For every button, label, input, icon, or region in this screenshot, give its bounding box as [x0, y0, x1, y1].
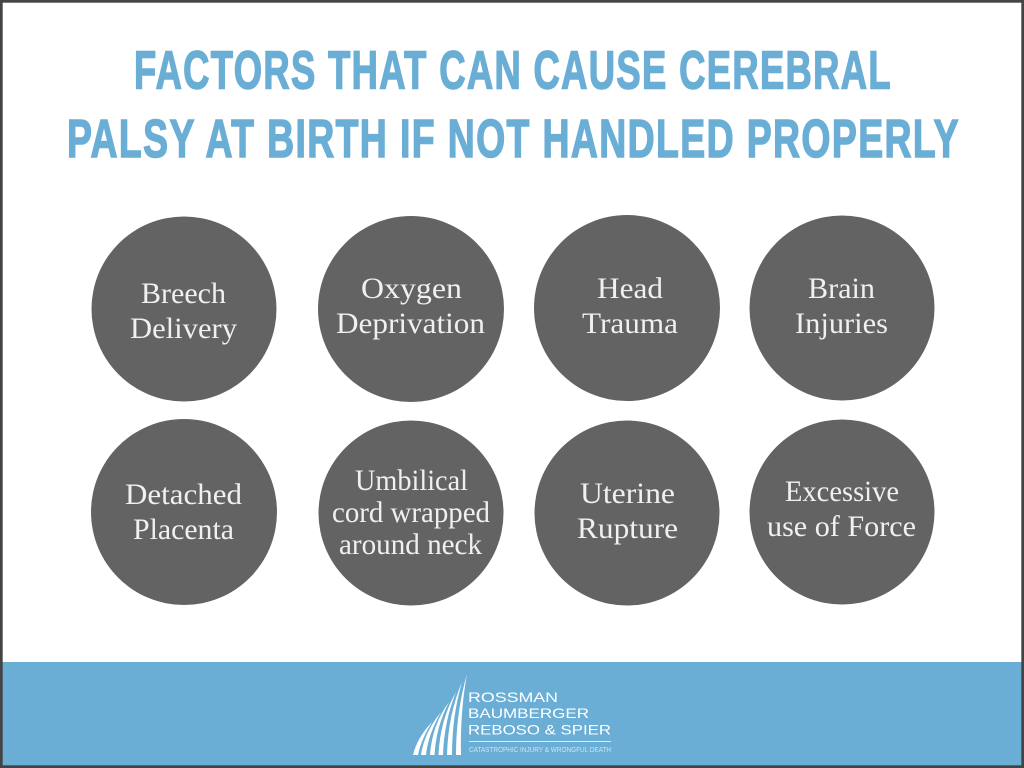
- factor: Excessive use of Force: [750, 420, 934, 604]
- logo wordmark: ROSSMAN: [468, 689, 558, 705]
- title: [67, 40, 960, 169]
- factor: Head Trauma: [534, 215, 720, 401]
- factor: Umbilical cord wrapped around neck: cord wrapped: [332, 497, 490, 529]
- factor: Detached Placenta: Placenta: [133, 514, 234, 546]
- factor: Umbilical cord wrapped around neck: around neck: [339, 529, 482, 561]
- logo wordmark: REBOSO & SPIER: [468, 722, 611, 738]
- factor: Uterine Rupture: [534, 420, 720, 606]
- factor: Detached Placenta: Detached: [125, 479, 242, 511]
- factor: Breech Delivery: [92, 216, 276, 402]
- factor: Head Trauma: Head: [597, 273, 663, 305]
- factor: Breech Delivery: Delivery: [130, 313, 237, 345]
- footer band: [0, 662, 1024, 768]
- logo: Rossman Baumberger Reboso & Spier: [413, 674, 611, 755]
- factor: Brain Injuries: Injuries: [795, 308, 888, 340]
- factor: Oxygen Deprivation: Deprivation: [336, 308, 485, 340]
- factor: Uterine Rupture: Uterine: [580, 478, 675, 510]
- icon: logo swoosh: [413, 674, 467, 755]
- logo divider: [469, 741, 611, 742]
- factor: Umbilical cord wrapped around neck: Umbilical: [355, 465, 468, 497]
- factor: Umbilical cord wrapped around neck: [318, 420, 504, 606]
- factor: Oxygen Deprivation: [318, 216, 504, 402]
- factor: Excessive use of Force: Excessive: [785, 476, 899, 508]
- factor: Uterine Rupture: Rupture: [577, 513, 678, 545]
- factor: Detached Placenta: [91, 419, 277, 605]
- factor: Excessive use of Force: use of Force: [767, 511, 916, 543]
- logo wordmark: BAUMBERGER: [468, 705, 589, 721]
- logo tagline: CATASTROPHIC INJURY & WRONGFUL DEATH: [469, 747, 611, 754]
- factor: Oxygen Deprivation: Oxygen: [361, 273, 462, 305]
- factor: Breech Delivery: Breech: [141, 278, 226, 310]
- factor: Brain Injuries: [750, 216, 934, 400]
- logo wordmark: [468, 689, 611, 738]
- factor: Brain Injuries: Brain: [808, 273, 875, 305]
- factor: Head Trauma: Trauma: [582, 308, 678, 340]
